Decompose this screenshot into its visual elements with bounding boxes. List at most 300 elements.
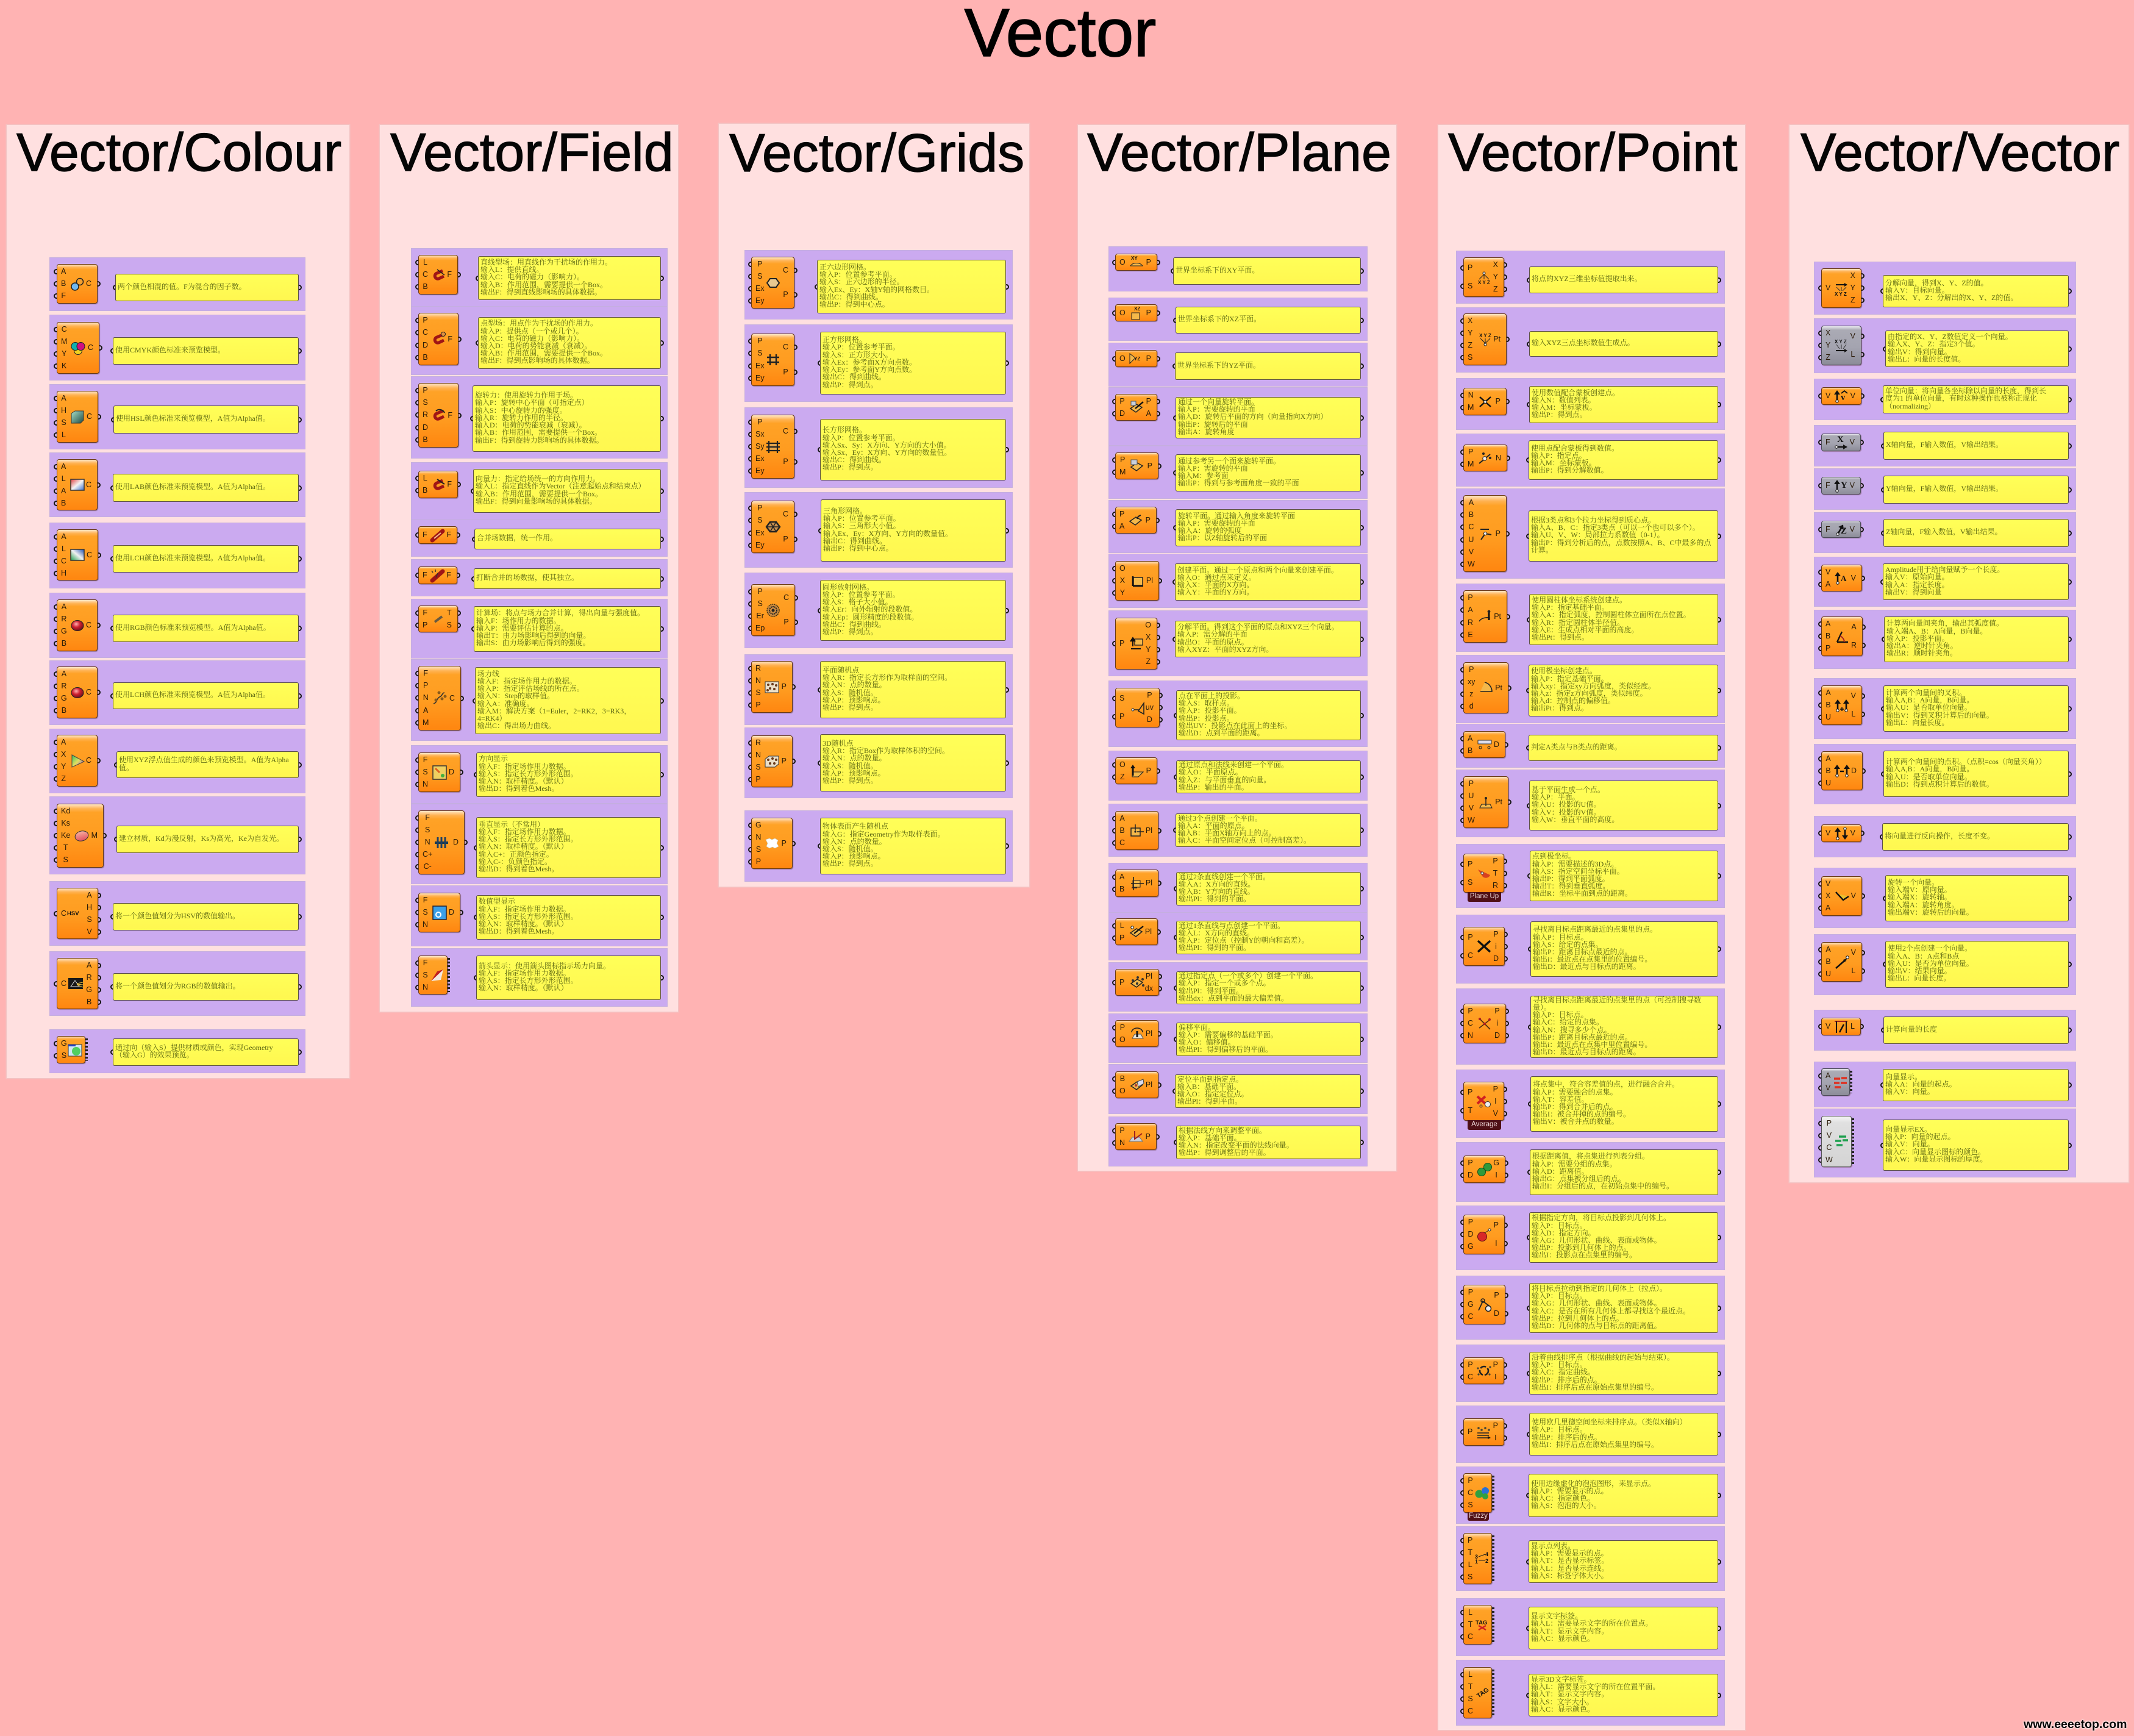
description — [1175, 621, 1361, 657]
component: construct point: Pt — [1493, 335, 1501, 343]
icon: X axis: X — [1836, 434, 1844, 444]
component: field line: P — [423, 681, 428, 690]
description: 世界坐标系下的YZ平面。 — [1177, 361, 1260, 370]
component: field line: F — [423, 669, 428, 677]
icon: unit arrow — [1834, 389, 1849, 404]
description: 输出P：以Z轴旋转后的平面 — [1178, 534, 1267, 542]
component: CMYK — [57, 322, 99, 374]
description: 三角形网格。 — [823, 507, 867, 515]
description: 输入Y：平面的Y方向。 — [1177, 588, 1254, 596]
description: 输入P：指定评估场线的所在点。 — [477, 684, 584, 693]
description — [1176, 921, 1361, 954]
description — [476, 956, 661, 1000]
component: spin force: F — [448, 411, 452, 420]
icon: polar point — [1479, 680, 1493, 695]
component: point charge — [418, 313, 459, 365]
description: 两个颜色相混的值。F为混合的因子数。 — [118, 282, 246, 291]
component: radial grid: Ep — [755, 624, 765, 632]
description: 输入P：目标点。 — [1533, 1010, 1588, 1019]
component: fuzzy points: C — [1468, 1488, 1473, 1497]
component row: plane normal — [1109, 751, 1367, 800]
component: rotate vector: V — [1851, 891, 1856, 900]
description: 输出P：得到点。 — [823, 463, 878, 471]
component: project point: I — [1495, 1239, 1497, 1248]
component: closest points: i — [1496, 1019, 1498, 1027]
description — [1885, 330, 2069, 367]
icon: red arrows — [1833, 1074, 1847, 1089]
component row: LCH — [50, 523, 305, 588]
label: Average: Average — [1471, 1121, 1497, 1128]
icon: xyz and arrow — [1834, 338, 1849, 352]
component: construct plane: Pl — [1146, 576, 1153, 585]
component: unit Z: F — [1825, 524, 1830, 533]
component row: distance — [1457, 724, 1724, 767]
description: 世界坐标系下的XZ平面。 — [1178, 315, 1261, 323]
description: 输入P：指定点。 — [1531, 451, 1586, 460]
description — [1529, 386, 1718, 423]
description: 输出D：点到平面的距离。 — [1179, 729, 1265, 737]
component row: reverse — [1815, 816, 2075, 857]
description — [1176, 307, 1361, 334]
component row: plane fit — [1109, 963, 1367, 1011]
description: 通过3个点创建一个平面。 — [1178, 814, 1262, 823]
icon: point arrows — [1478, 451, 1493, 465]
component: split RGB: B — [87, 998, 91, 1006]
description: 点在平面上的投影。 — [1179, 691, 1244, 700]
description: 输入P：需要偏移的基础平面。 — [1179, 1031, 1278, 1039]
component: perpendicular display: F — [425, 813, 430, 822]
description: 输入A：向量的起点。 — [1885, 1080, 1957, 1088]
component: plane fit: dx — [1145, 984, 1153, 993]
component: blend: C — [86, 279, 91, 288]
component row: closest point — [1457, 915, 1724, 983]
description: 输入P：需要旋转的平面 — [1178, 405, 1255, 413]
description — [1883, 563, 2069, 600]
component: align plane — [1115, 394, 1157, 421]
component: perpendicular display: N — [425, 838, 430, 846]
component: plane normal: O — [1119, 760, 1126, 768]
component: triangular grid: P — [783, 535, 788, 543]
component: blend — [57, 264, 98, 304]
description: 输入S：随机值。 — [823, 688, 878, 696]
component: spin force — [418, 383, 459, 448]
description: 输入A：指定弧度，控制圆柱体立面所在点位置。 — [1532, 610, 1691, 619]
component: RGB: C — [86, 621, 91, 629]
component: point charge: B — [423, 353, 428, 362]
component row: arrow display — [412, 949, 667, 1006]
icon: cross arrows — [1478, 394, 1493, 409]
component row: point cylindrical — [1457, 584, 1724, 651]
component: point list: L — [1468, 1560, 1472, 1568]
description: 合并场数据，统一作用。 — [477, 534, 557, 542]
component: line point plane: Pl — [1145, 927, 1152, 935]
component row: plane closest point — [1109, 681, 1367, 746]
component: XYZ: A — [61, 738, 66, 746]
icon: triangular grid — [766, 520, 780, 534]
component: direction display: N — [423, 780, 428, 788]
component row: plane origin — [1109, 1065, 1367, 1113]
description — [1529, 331, 1718, 357]
description — [1884, 616, 2069, 662]
component: group points: G — [1493, 1159, 1499, 1167]
component: field line: C — [449, 694, 455, 702]
component: split RGB — [57, 958, 98, 1009]
component: CMYK: C — [88, 343, 93, 352]
description: X轴向量，F输入数值，V输出结果。 — [1886, 440, 2003, 449]
heading: Vector/Plane: Vector/Plane — [1087, 122, 1391, 182]
description: 输入P：需要显示的点。 — [1531, 1549, 1608, 1557]
component: closest point: P — [1493, 929, 1499, 938]
description: 输入d：控制点的偏移值。 — [1531, 696, 1615, 705]
icon: numbered list: 1 — [1474, 1559, 1478, 1565]
component row: XZ plane — [1109, 298, 1367, 340]
description: 输入P：投影平面。 — [1179, 706, 1241, 715]
component: vector length: V — [1825, 1022, 1830, 1031]
icon: XY: XY — [1130, 255, 1138, 261]
description: 输入C+：正颜色指定。 — [479, 850, 554, 859]
description: 旋转一个向量。 — [1888, 878, 1939, 887]
component: project point: P — [1468, 1218, 1473, 1226]
component: point polar: P — [1469, 665, 1474, 673]
component row: vector 2pt — [1815, 935, 2075, 995]
component: numbers to points — [1463, 388, 1507, 415]
description: 输出dx：点到平面的最大偏差值。 — [1179, 994, 1288, 1002]
component: align to plane: P — [1147, 461, 1152, 470]
icon: TAG with red cross: TAG — [1476, 1620, 1487, 1626]
component: LCH: C — [87, 550, 92, 559]
component: construct vector: V — [1850, 332, 1855, 340]
description: 打断合并的场数据，使其独立。 — [476, 573, 579, 582]
component row: vector display EX — [1815, 1109, 2075, 1177]
component: angle: B — [1825, 632, 1830, 640]
description: 输出P：得到中心点。 — [819, 300, 890, 309]
component: group points: D — [1468, 1171, 1473, 1179]
description: 输入F：指定场作用力数据。 — [479, 762, 571, 771]
description: 使用LCH颜色标准来预览模型。A值为Alpha值。 — [115, 690, 270, 699]
description: （输入G）的效果预览。 — [115, 1051, 194, 1059]
description: 输入O：偏移值。 — [1179, 1038, 1235, 1046]
panel: Vector/Point — [1438, 125, 1745, 1730]
description: 输入D：旋转后平面的方向（向量指向X方向） — [1178, 412, 1327, 421]
component row: direction display — [412, 746, 667, 803]
icon: plane fit — [1130, 975, 1144, 990]
description: 输出Pt：得到点。 — [1532, 633, 1589, 641]
component: vector 2pt: V — [1851, 948, 1856, 957]
component row: angle — [1815, 610, 2075, 668]
component: construct vector: Y — [1825, 341, 1830, 349]
component: XY plane: O — [1119, 257, 1126, 266]
description: 使用CMYK颜色标准来预览模型。 — [115, 346, 225, 354]
icon: dot product arrows — [1835, 763, 1849, 778]
component: evaluate field: P — [423, 621, 427, 629]
component: line line plane: B — [1119, 885, 1124, 893]
component: project point — [1463, 1215, 1505, 1254]
description: 输入C：显示颜色。 — [1531, 1634, 1594, 1643]
icon: plane origin — [1129, 1077, 1144, 1092]
component: construct plane: X — [1120, 576, 1125, 585]
description: 正方形网格。 — [823, 335, 866, 344]
component row: point oriented — [1457, 770, 1724, 837]
component: merge fields: F — [446, 530, 451, 539]
description: 输入D：电荷的势能衰减（衰减）。 — [480, 341, 592, 350]
description: 4=RK4） — [477, 714, 506, 723]
component: point polar: Pt — [1495, 683, 1502, 691]
component: populate geometry: G — [755, 821, 762, 829]
component: vector display: A — [1825, 1071, 1830, 1080]
component row: fuzzy points — [1457, 1467, 1724, 1523]
component: pull point — [1463, 1285, 1505, 1324]
icon: xyz to point — [1478, 332, 1493, 346]
description: 输入U、V、W：局部拉力系数值（0-1）。 — [1531, 530, 1665, 539]
component: plane closest point: P — [1147, 691, 1152, 699]
description: 输入Z：与平面垂直的向量。 — [1179, 776, 1271, 784]
icon: axes and plane — [1130, 573, 1144, 588]
icon: barycentric — [1478, 526, 1493, 541]
component: point list: S — [1468, 1572, 1472, 1581]
icon: small arrow — [430, 612, 445, 626]
description: 输出Pt：得到点。 — [1531, 704, 1588, 712]
description: 输入S：标签字体大小。 — [1531, 1571, 1608, 1580]
component row: cross product — [1815, 679, 2075, 738]
component: plane origin: B — [1120, 1074, 1125, 1083]
description: 输出F：得到向量影响场的具体数据。 — [476, 497, 597, 505]
component: sort points: P — [1468, 1427, 1472, 1436]
component row: barycentric — [1457, 489, 1724, 578]
description: 将向量进行反向操作，长度不变。 — [1885, 832, 1994, 840]
component: group points: I — [1495, 1171, 1497, 1179]
component row: vector force — [412, 463, 667, 519]
description: （normalizing） — [1885, 402, 1935, 410]
description: 输出C：得到曲线。 — [823, 537, 887, 545]
description: 旋转力：使用旋转力作用于场。 — [475, 391, 577, 399]
description: 输出UV：投影点在此面上的坐标。 — [1179, 721, 1291, 730]
component row: points to numbers — [1457, 434, 1724, 486]
description: 输入S：泡泡的大小。 — [1531, 1501, 1601, 1510]
icon: line point plane — [1129, 924, 1144, 939]
component: pull point: P — [1494, 1291, 1499, 1299]
description — [817, 260, 1006, 313]
description: 输入P：需旋转的平面 — [1178, 464, 1248, 473]
component: sort along curve: P — [1468, 1360, 1473, 1368]
panel: Vector/Colour — [7, 125, 349, 1078]
description — [113, 615, 299, 642]
component: distance: A — [1468, 734, 1472, 743]
component: RGB: B — [62, 639, 66, 648]
description: 直线型场：用直线作为干扰场的作用力。 — [480, 258, 612, 266]
icon: HSV text: HSV — [67, 910, 79, 917]
component: deconstruct point: X — [1493, 260, 1498, 269]
component: sort along curve: P — [1493, 1360, 1498, 1368]
description — [820, 734, 1006, 791]
component: split HSV — [57, 888, 98, 939]
component row: populate 2D — [745, 655, 1012, 724]
component: barycentric: U — [1468, 535, 1474, 544]
description: 输入端A：旋转角度。 — [1888, 901, 1959, 909]
component: rectangular grid: Ex — [755, 454, 765, 463]
description: 输入A：X方向的直线。 — [1179, 880, 1255, 888]
description: 输出F：得到旋转力影响场的具体数据。 — [475, 435, 604, 444]
component: material: M — [91, 831, 98, 840]
description: 输入V：向量。 — [1885, 1087, 1935, 1096]
component: XZ plane: P — [1146, 309, 1151, 317]
icon: two planes — [1129, 459, 1144, 473]
description — [478, 317, 661, 369]
component row: YZ plane — [1109, 343, 1367, 386]
component: cross product: U — [1825, 713, 1831, 721]
component: sort points: P — [1493, 1421, 1498, 1430]
component row: vector length — [1815, 1010, 2075, 1050]
description: 输入P：预影响点。 — [823, 769, 885, 777]
component: plane normal: P — [1146, 766, 1151, 774]
component row: point list — [1457, 1527, 1724, 1590]
component: deconstruct point — [1463, 257, 1504, 297]
component: plane 3pt: B — [1119, 826, 1125, 834]
icon: red wedge — [1477, 866, 1491, 881]
component: scalar display: D — [449, 908, 454, 916]
component: fuzzy points: P — [1468, 1476, 1473, 1485]
description — [476, 752, 661, 797]
component: plane closest point: uv — [1146, 703, 1154, 712]
description — [1529, 440, 1718, 480]
description: 通过一个向量旋转平面。 — [1178, 398, 1258, 406]
description: 输出P：得到分解数值。 — [1531, 466, 1608, 474]
component: points to numbers: P — [1468, 448, 1473, 456]
description: 输入T：显示文字内容。 — [1531, 1690, 1608, 1698]
component: HSL — [57, 391, 98, 443]
description — [1883, 432, 2069, 460]
component: LAB: L — [62, 474, 66, 483]
icon: sort points — [1477, 1424, 1491, 1439]
component row: unit Y — [1815, 469, 2075, 509]
component: pull point: C — [1468, 1312, 1473, 1321]
component: deconstruct vector: X — [1850, 271, 1855, 280]
component: group points: P — [1468, 1159, 1473, 1167]
icon: numbered list — [1474, 1551, 1489, 1566]
icon: magnet with line — [433, 269, 445, 280]
description: 长方形网格。 — [823, 426, 866, 434]
component: hexagonal: S — [757, 272, 762, 280]
component: spin force: P — [423, 386, 428, 395]
icon: two lines plane — [1129, 876, 1144, 890]
description: 输入L：需要显示文字的所在位置平面。 — [1531, 1682, 1660, 1691]
description: 输入C：电荷的磁力（影响力）。 — [480, 273, 584, 281]
component: RGB: R — [61, 615, 66, 623]
component: closest points: P — [1494, 1007, 1500, 1015]
description — [474, 568, 661, 589]
component: closest point: D — [1493, 954, 1499, 962]
description: 输入z：指定z方向弧度，类似纬度。 — [1531, 689, 1647, 698]
description — [1530, 1149, 1718, 1195]
component: closest point: P — [1468, 933, 1473, 941]
component: material: Ks — [61, 819, 70, 827]
description: 输入T：显示文字内容。 — [1531, 1627, 1608, 1635]
component: RGB linear: A — [62, 670, 66, 678]
description: 输入U：是否取单位向量。 — [1886, 772, 1972, 780]
description: 输入B：作用范围，需要提供一个Box。 — [480, 349, 607, 357]
description: 向量力：指定给场统一的方向作用力。 — [476, 474, 600, 483]
description: 输入S：指定长方形外形范围。 — [479, 912, 578, 921]
icon: XZ — [1129, 305, 1144, 320]
component: vector length: L — [1850, 1022, 1855, 1031]
component: unit vector: V — [1825, 391, 1830, 400]
component row: triangular grid — [745, 493, 1012, 567]
component: populate geometry — [751, 818, 793, 869]
icon: rectangular grid — [766, 439, 780, 454]
description — [113, 474, 299, 502]
icon: xyz and arrow: X Y Z — [1835, 339, 1847, 344]
component: point cylindrical: P — [1468, 593, 1473, 602]
component: rotate vector: X — [1825, 891, 1830, 900]
description: 输入P：指定基础平面。 — [1531, 674, 1608, 683]
component: YZ plane: O — [1119, 354, 1126, 362]
component: arrow display: N — [423, 983, 428, 991]
description: 输入B：平面X轴方向上的点。 — [1178, 829, 1276, 837]
component: triangular grid: Ey — [755, 541, 765, 549]
description: 输出L：向量长度。 — [1886, 718, 1949, 727]
description: 输入F：指定场作用力数据。 — [479, 905, 571, 913]
description — [1176, 971, 1361, 1004]
component: closest points: N — [1468, 1031, 1473, 1040]
description: 输入U：投影的U值。 — [1532, 800, 1601, 809]
label: Average — [1468, 1120, 1501, 1130]
component: evaluate field: F — [423, 609, 427, 617]
description: 输出O：平面的原点。 — [1177, 638, 1249, 646]
component: rotate plane — [1115, 507, 1157, 534]
description: 输入Ep：圆形精度的段数值。 — [823, 613, 918, 621]
description: 输入O：指定定位点。 — [1177, 1090, 1249, 1098]
description — [1529, 1413, 1718, 1456]
component: populate 3D: R — [755, 738, 761, 747]
component: barycentric: W — [1468, 560, 1475, 568]
component: point oriented: P — [1469, 779, 1474, 788]
description: 将点集中，符合容差值的点，进行融合合并。 — [1533, 1080, 1679, 1088]
component: distance — [1463, 731, 1505, 758]
component: hexagonal: Ey — [755, 296, 765, 305]
description: 输入N：数值列表。 — [1532, 396, 1596, 404]
description: 输出P：得到点。 — [823, 380, 878, 389]
description: 输入S：三角形大小值。 — [823, 521, 901, 530]
description: 输出P：得到分析后的点，点数按照A、B、C中最多的点 — [1531, 538, 1711, 547]
description: 输出P：得到合并后的点。 — [1533, 1102, 1618, 1111]
description: 输出X、Y、Z：分解出的X、Y、Z的值。 — [1885, 293, 2018, 302]
description: 输入P：位置参考平面。 — [823, 343, 900, 351]
description: 输入端A、B：A向量，B向量。 — [1886, 627, 1987, 635]
component: field line: M — [423, 718, 429, 727]
component row: align plane — [1109, 388, 1367, 445]
description — [1883, 385, 2069, 413]
description: 输入O：平面原点。 — [1179, 768, 1243, 776]
description: 输入N：点的数量。 — [823, 837, 887, 846]
component: sort along curve — [1463, 1357, 1504, 1384]
component: vector display EX — [1821, 1116, 1852, 1167]
icon: pull point — [1477, 1298, 1491, 1312]
component: align plane: A — [1146, 409, 1151, 417]
description — [1883, 1120, 2069, 1171]
component row: unit vector — [1815, 379, 2075, 420]
component row: cull duplicates — [1457, 1070, 1724, 1137]
description: 输出D：几何体的点与目标点的距离值。 — [1532, 1321, 1661, 1330]
description: 输入N：取样精度。（默认） — [479, 777, 568, 785]
description: 输入C：指定颜色。 — [1531, 1494, 1594, 1502]
description: 输入C：显示颜色。 — [1531, 1705, 1594, 1713]
description: 使用点配合蒙板得到数值。 — [1531, 444, 1619, 452]
description: 输入A,B：A向量，B向量。 — [1886, 765, 1974, 773]
component: spin force: D — [423, 423, 428, 432]
component: arrow display — [418, 956, 448, 995]
component: align to plane: P — [1120, 455, 1125, 463]
description: 输入XYZ三点坐标数值生成点。 — [1532, 338, 1635, 347]
description: 输入X：平面的X方向。 — [1177, 580, 1254, 589]
